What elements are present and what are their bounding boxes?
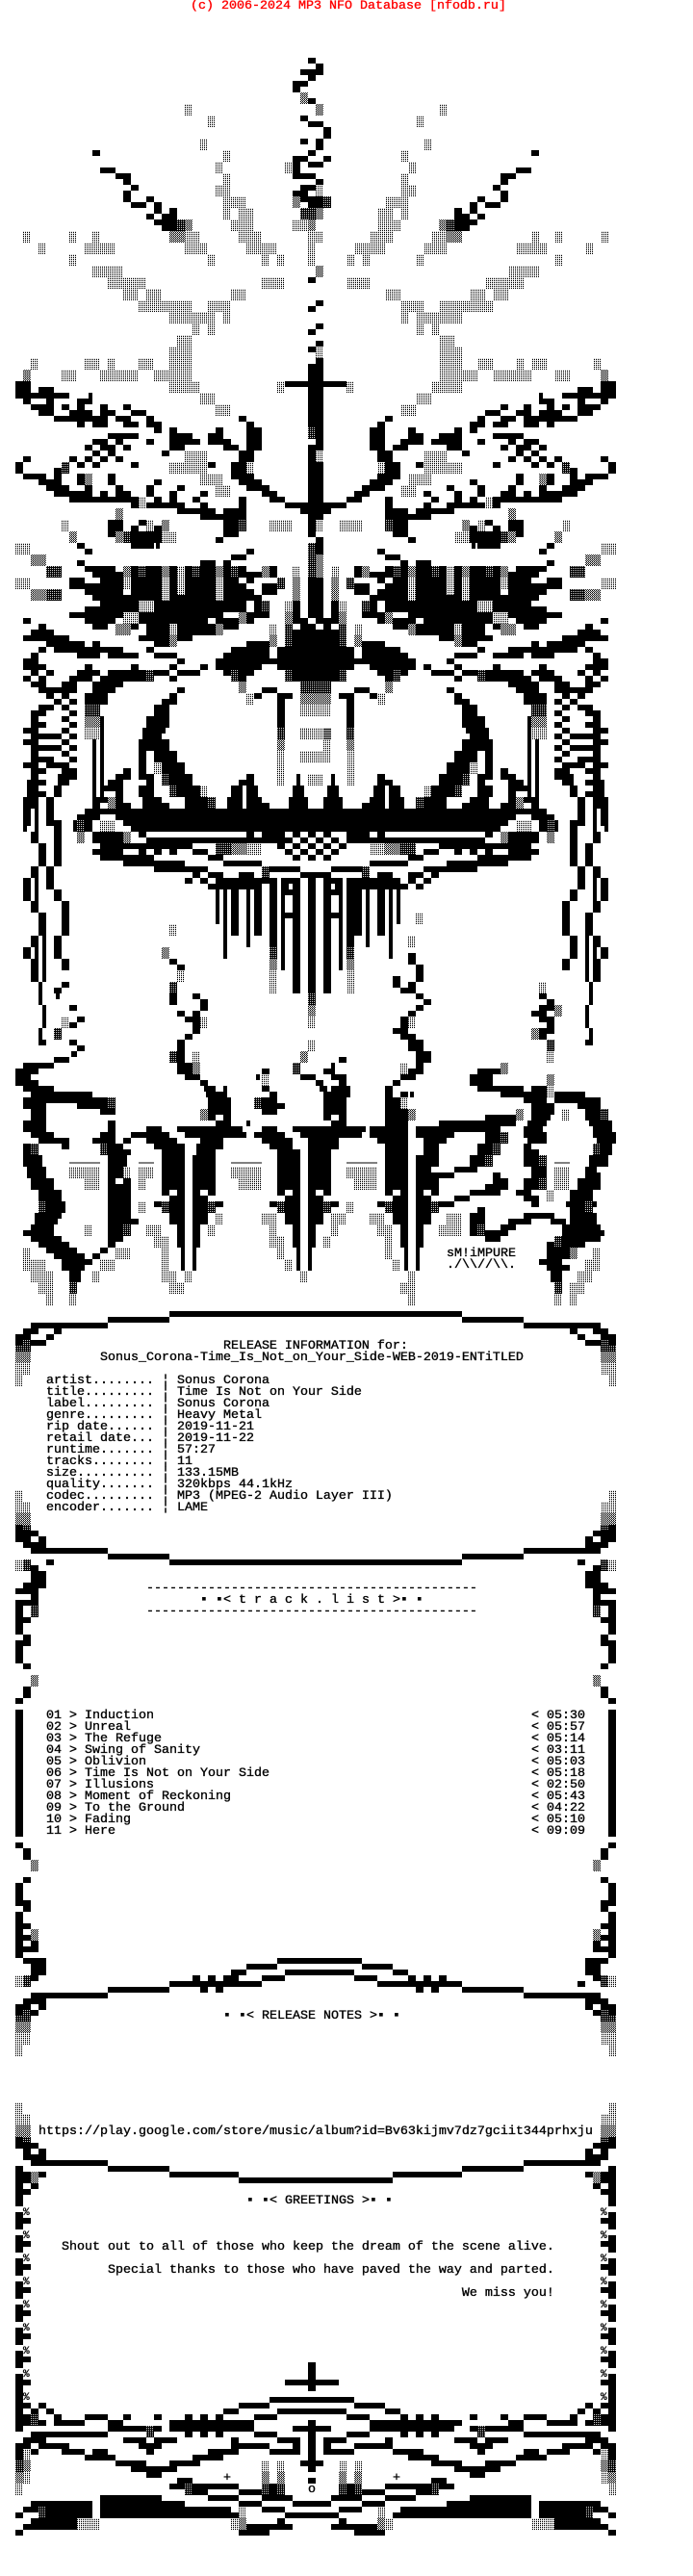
heading: track list: ------------------------------------------- ▪ ▪< t r a c k . l i s t >▪ ▪ ------------------------------------------- [146,1582,477,1619]
border marks: percent glyphs left: % % % % % % % % % [23,2207,30,2404]
art: radiating rays and face, mirrored [15,110,616,875]
frame: greetings panel border [15,2108,616,2432]
art: bottom ornament centre crosses and arcs [169,2362,462,2533]
art: inner smoke trails and stray dots [54,881,562,1057]
art: central spike and cross [277,61,354,875]
heading: release notes: ▪ ▪< RELEASE NOTES >▪ ▪ [223,2009,400,2023]
art: mouth checkerboard [277,835,346,858]
text block: track durations: < 05:30 < 05:57 < 05:14 < 03:11 < 05:03 < 05:18 < 02:50 < 05:43 < 04:22 < 05:10 < 09:09 [531,1709,585,1839]
text block: release details: artist........ ¦ Sonus Corona title......... ¦ Time Is Not on Your Side label......... ¦ Sonus Corona genre......... ¦ Heavy Metal rip date...... ¦ 2019-11-21 retail date... ¦ 2019-11-22 runtime....... ¦ 57:27 tracks........ ¦ 11 size.......... ¦ 133.15MB quality....... ¦ 320kbps 44.1kHz codec......... ¦ MP3 (MPEG-2 Audio Layer III) encoder....... ¦ LAME [46,1374,393,1515]
ornament marks: plus signs and small o: + + o [223,2471,400,2497]
text block: greetings message: Shout out to all of those who keep the dream of the scene alive. Special thanks to those who have paved the way and parted. We miss you! [62,2240,554,2301]
credit: ripper tag: sM!iMPURE ./\\//\\. [447,1247,516,1273]
logo: ENTiTLED right half [316,1060,616,1300]
art: bottom ornament outer wings [15,2406,616,2533]
text block: store url: https://play.google.com/store/music/album?id=Bv63kijmv7dz7gciit344prhxju [38,2125,593,2139]
border marks: percent glyphs right: % % % % % % % % % [601,2207,607,2404]
art: drips under the mouth [208,878,408,1022]
art: side pillars below the face [27,866,604,1045]
heading: greetings: ▪ ▪< GREETINGS >▪ ▪ [246,2194,393,2208]
heading: release information: RELEASE INFORMATION for: Sonus_Corona-Time_Is_Not_on_Your_Side-WEB-2019-ENTiTLED [0,1339,524,1365]
frame: release information panel border [15,1314,616,1562]
text block: track names: 01 > Induction 02 > Unreal 03 > The Refuge 04 > Swing of Sanity 05 > Oblivion 06 > Time Is Not on Your Side 07 > Illusions 08 > Moment of Reckoning 09 > To the Ground 10 > Fading 11 > Here [46,1709,270,1839]
frame: track list panel border with arch [15,1562,616,2050]
logo: ENTiTLED left half [15,1060,316,1300]
